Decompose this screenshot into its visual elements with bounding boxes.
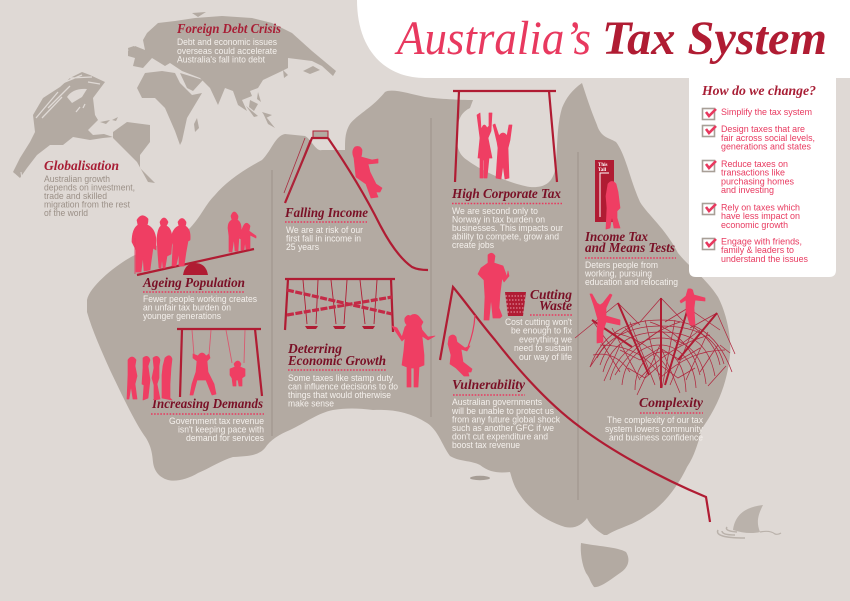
map: Australia mainland xyxy=(87,83,730,535)
block: Increasing Demands: Increasing Demands xyxy=(151,396,263,411)
list of changes: have less impact on xyxy=(721,210,800,221)
block: Vulnerability: don't cut expenditure and xyxy=(452,432,548,442)
checkboxes xyxy=(702,108,716,250)
block: High Corporate Tax xyxy=(451,186,563,250)
block: Vulnerability xyxy=(451,377,560,450)
list of changes: economic growth xyxy=(721,219,788,230)
block: Complexity: and business confidence xyxy=(609,432,703,442)
map: world continents xyxy=(13,12,336,183)
block: Falling Income: first fall in income in xyxy=(286,234,361,244)
block: Increasing Demands xyxy=(151,396,264,443)
block: High Corporate Tax: We are second only to xyxy=(452,206,538,216)
block: Cutting Waste: be enough to fix xyxy=(511,326,572,336)
list of changes: understand the issues xyxy=(721,253,808,264)
block: Cutting Waste: our way of life xyxy=(519,352,572,362)
block: Globalisation: Australian growth xyxy=(44,174,110,184)
block: Vulnerability: boost tax revenue xyxy=(452,440,520,450)
block: Ageing Population: Ageing Population xyxy=(142,275,245,290)
block: Increasing Demands: demand for services xyxy=(186,433,264,443)
illustration: taped-off swing set with girl xyxy=(285,279,435,387)
block: High Corporate Tax: High Corporate Tax xyxy=(451,186,561,201)
block: Increasing Demands: Government tax revenue xyxy=(169,416,264,426)
block: Deterring Economic Growth: Deterring xyxy=(287,341,342,356)
list of changes: fair across social levels, xyxy=(721,132,815,143)
block: Deterring Economic Growth: things that would otherwise xyxy=(288,390,391,400)
illustration: height chart with child: Tall xyxy=(598,168,607,173)
block: Deterring Economic Growth: can influence decisions to do xyxy=(288,382,398,392)
block: Globalisation: of the world xyxy=(44,208,88,218)
block: Falling Income: We are at risk of our xyxy=(286,225,363,235)
block: Falling Income xyxy=(284,205,368,252)
panel: how do we change xyxy=(689,78,836,277)
title xyxy=(394,12,827,65)
block: Foreign Debt Crisis: Debt and economic issues xyxy=(177,37,277,47)
map: Tasmania xyxy=(581,543,628,587)
block: Globalisation xyxy=(44,158,135,218)
list of changes: family & leaders to xyxy=(721,244,794,255)
block: Globalisation: trade and skilled xyxy=(44,191,107,201)
list of changes xyxy=(721,106,815,264)
block: Complexity: system lowers community xyxy=(605,424,703,434)
block: Income Tax and Means Tests xyxy=(584,229,678,287)
block: Foreign Debt Crisis xyxy=(176,21,281,64)
list of changes: Simplify the tax system xyxy=(721,106,812,117)
list of changes: generations and states xyxy=(721,140,811,152)
block: Complexity: The complexity of our tax xyxy=(607,415,703,425)
block: Vulnerability: from any future global shock xyxy=(452,414,560,424)
illustration: swing frame with two cheering children xyxy=(453,91,557,182)
illustration: seesaw with adults and children xyxy=(132,212,256,275)
list of changes: Rely on taxes which xyxy=(721,202,800,212)
list of changes: Design taxes that are xyxy=(721,123,805,134)
illustration: complexity lattice dome with children xyxy=(575,289,735,395)
block: Ageing Population xyxy=(142,275,257,321)
block: Complexity: Complexity xyxy=(639,395,703,410)
list of changes: and investing xyxy=(721,184,774,195)
illustration: man with waste basket xyxy=(478,253,526,320)
block: Vulnerability: such as another GFC if we xyxy=(452,423,554,433)
block: Increasing Demands: isn't keeping pace with xyxy=(178,424,264,434)
block: Globalisation: migration from the rest xyxy=(44,200,130,210)
list of changes: Reduce taxes on xyxy=(721,158,788,169)
block: Vulnerability: Australian governments xyxy=(452,397,542,407)
illustration: height chart with child xyxy=(595,160,620,229)
divider lines xyxy=(272,118,578,500)
block: Deterring Economic Growth: make sense xyxy=(288,398,334,408)
block: Ageing Population: Fewer people working creates xyxy=(143,294,257,304)
block: Income Tax and Means Tests: Deters people from xyxy=(585,260,658,270)
title: Australia’s xyxy=(394,12,591,65)
block: Ageing Population: younger generations xyxy=(143,311,221,321)
block: Cutting Waste: Cost cutting won't xyxy=(505,317,572,327)
panel heading: How do we change? xyxy=(701,83,816,98)
illustration: swings with four waiting children xyxy=(127,329,262,400)
block: Falling Income: 25 years xyxy=(286,242,319,252)
block: Globalisation: Globalisation xyxy=(44,158,119,173)
block: Foreign Debt Crisis: Australia's fall into debt xyxy=(177,54,265,64)
block: High Corporate Tax: ability to compete, grow and xyxy=(452,232,559,242)
block: Globalisation: depends on investment, xyxy=(44,182,135,192)
block: Income Tax and Means Tests: working, pursuing xyxy=(584,268,652,278)
block: Cutting Waste: Waste xyxy=(539,298,572,313)
block: Cutting Waste xyxy=(505,287,572,362)
list of changes: transactions like xyxy=(721,166,785,178)
block: Falling Income: Falling Income xyxy=(284,205,368,220)
title: Tax System xyxy=(602,12,827,65)
title banner xyxy=(357,0,850,78)
block: Cutting Waste: Cutting xyxy=(530,287,572,302)
block: Vulnerability: Vulnerability xyxy=(452,377,525,392)
block: Income Tax and Means Tests: Income Tax xyxy=(584,229,648,244)
list of changes: Engage with friends, xyxy=(721,236,802,246)
block: Income Tax and Means Tests: and Means Tests xyxy=(585,240,675,255)
block: Cutting Waste: need to sustain xyxy=(514,343,572,353)
illustration: shark fin xyxy=(718,505,781,538)
block: Ageing Population: an unfair tax burden on xyxy=(143,302,231,312)
block: Complexity xyxy=(605,395,703,442)
illustration: height chart with child: This xyxy=(598,163,608,168)
block: Vulnerability: will be unable to protect us xyxy=(451,406,554,416)
map: small island xyxy=(470,476,490,480)
block: Income Tax and Means Tests: education and relocating xyxy=(585,277,678,287)
block: Deterring Economic Growth: Economic Growth xyxy=(287,353,386,368)
block: High Corporate Tax: businesses. This impacts our xyxy=(452,223,563,233)
list of changes: purchasing homes xyxy=(721,176,794,186)
block: Foreign Debt Crisis: Foreign Debt Crisis xyxy=(176,21,281,36)
illustration: long swing with child over shark xyxy=(440,287,710,522)
block: High Corporate Tax: create jobs xyxy=(452,240,494,250)
block: Cutting Waste: everything we xyxy=(519,334,572,344)
block: Foreign Debt Crisis: overseas could accelerate xyxy=(177,46,277,56)
block: Deterring Economic Growth: Some taxes like stamp duty xyxy=(288,373,393,383)
illustration: slide with child xyxy=(284,131,428,270)
block: High Corporate Tax: Norway in tax burden on xyxy=(452,214,545,224)
block: Deterring Economic Growth xyxy=(287,341,398,408)
